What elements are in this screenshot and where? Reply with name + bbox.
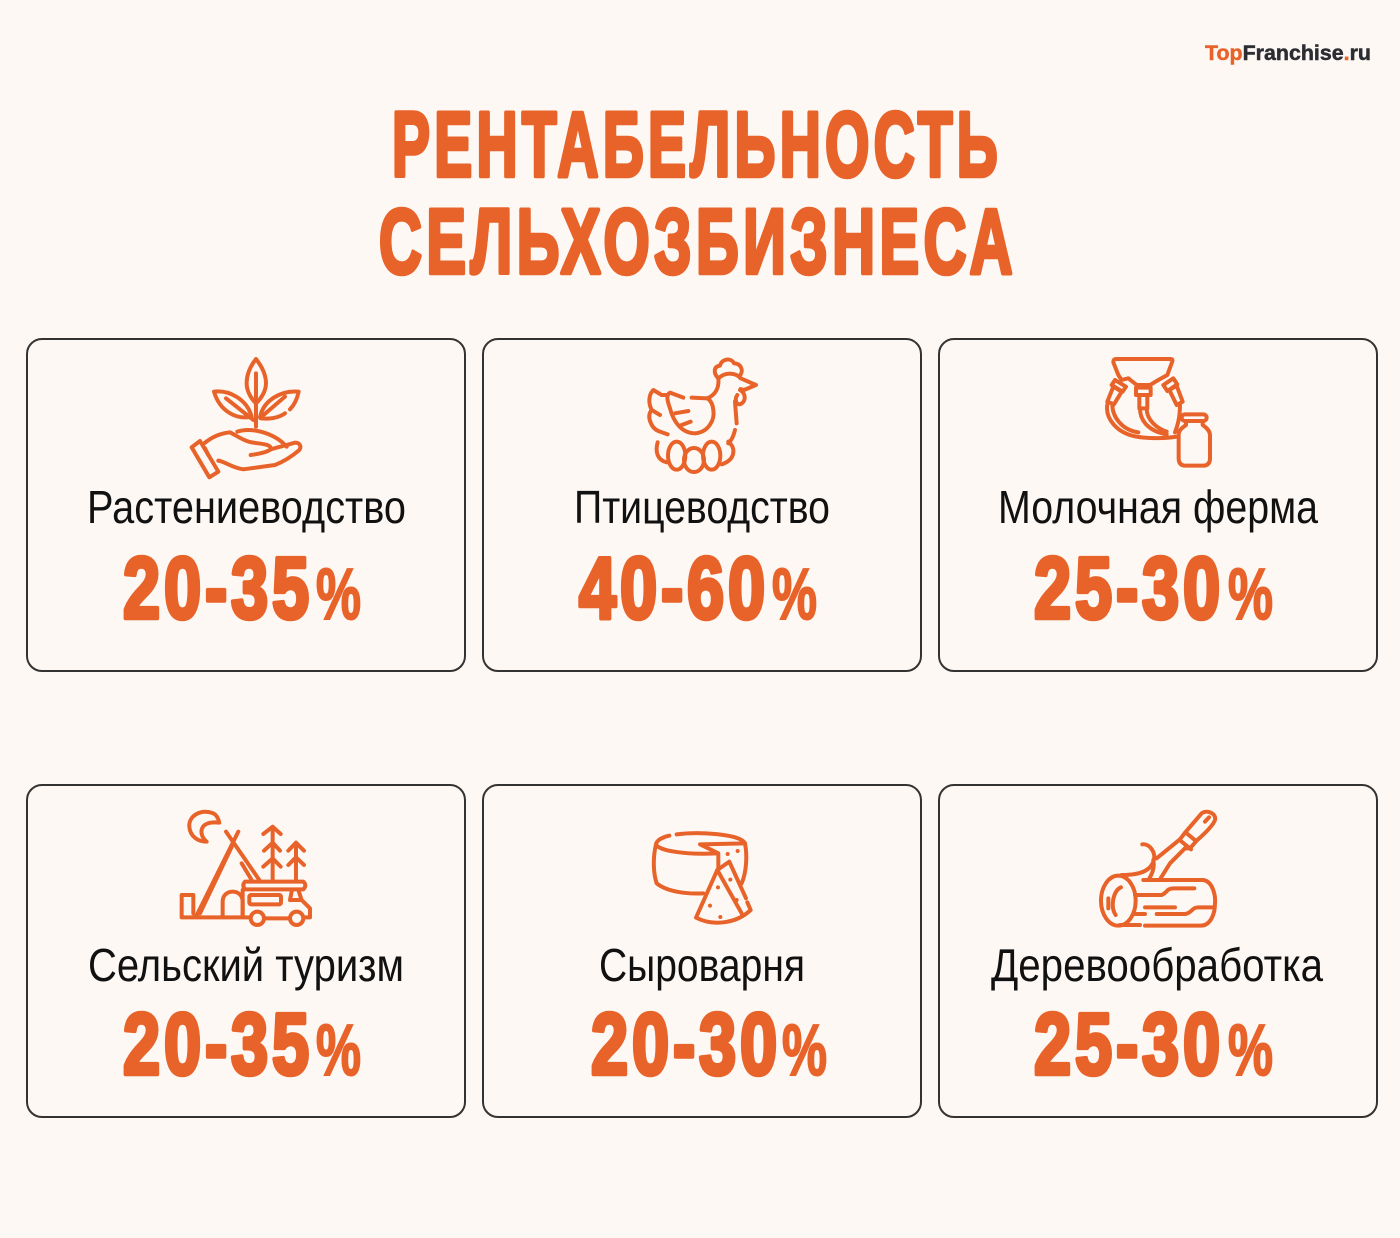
label: Сыроварня xyxy=(599,939,805,991)
panel: cheese dairy xyxy=(483,785,921,1117)
panel: dairy farm xyxy=(939,339,1377,671)
icon: milking machine and jar xyxy=(1107,359,1210,466)
label: Деревообработка xyxy=(991,939,1323,991)
panel: rural tourism xyxy=(27,785,465,1117)
panel: crop farming xyxy=(27,339,465,671)
icon: plant in hand xyxy=(192,359,300,477)
value: 25-30 xyxy=(1034,540,1224,637)
icon: hen on eggs xyxy=(649,360,756,472)
title xyxy=(379,94,1017,293)
icon: tent, trees and camper xyxy=(182,812,310,925)
value: 20-30 xyxy=(591,996,781,1093)
value: % xyxy=(1228,1011,1273,1091)
value: % xyxy=(316,1011,361,1091)
value: 20-35 xyxy=(123,540,313,637)
value: % xyxy=(772,555,817,635)
value: % xyxy=(782,1011,827,1091)
label: Птицеводство xyxy=(574,481,830,533)
value: 40-60 xyxy=(579,540,769,637)
title: СЕЛЬХОЗБИЗНЕСА xyxy=(379,191,1017,293)
label: Сельский туризм xyxy=(88,939,404,991)
value: 20-35 xyxy=(123,996,313,1093)
panel: poultry xyxy=(483,339,921,671)
label: Молочная ферма xyxy=(998,481,1318,533)
icon: axe in log xyxy=(1101,812,1215,926)
value: % xyxy=(1228,555,1273,635)
value: 25-30 xyxy=(1034,996,1224,1093)
logo: TopFranchise.ru: TopFranchise.ru xyxy=(1205,41,1371,65)
label: Растениеводство xyxy=(87,481,406,533)
value: % xyxy=(316,555,361,635)
icon: cheese wheel xyxy=(654,833,751,923)
panel: woodworking xyxy=(939,785,1377,1117)
title: РЕНТАБЕЛЬНОСТЬ xyxy=(392,94,1002,196)
